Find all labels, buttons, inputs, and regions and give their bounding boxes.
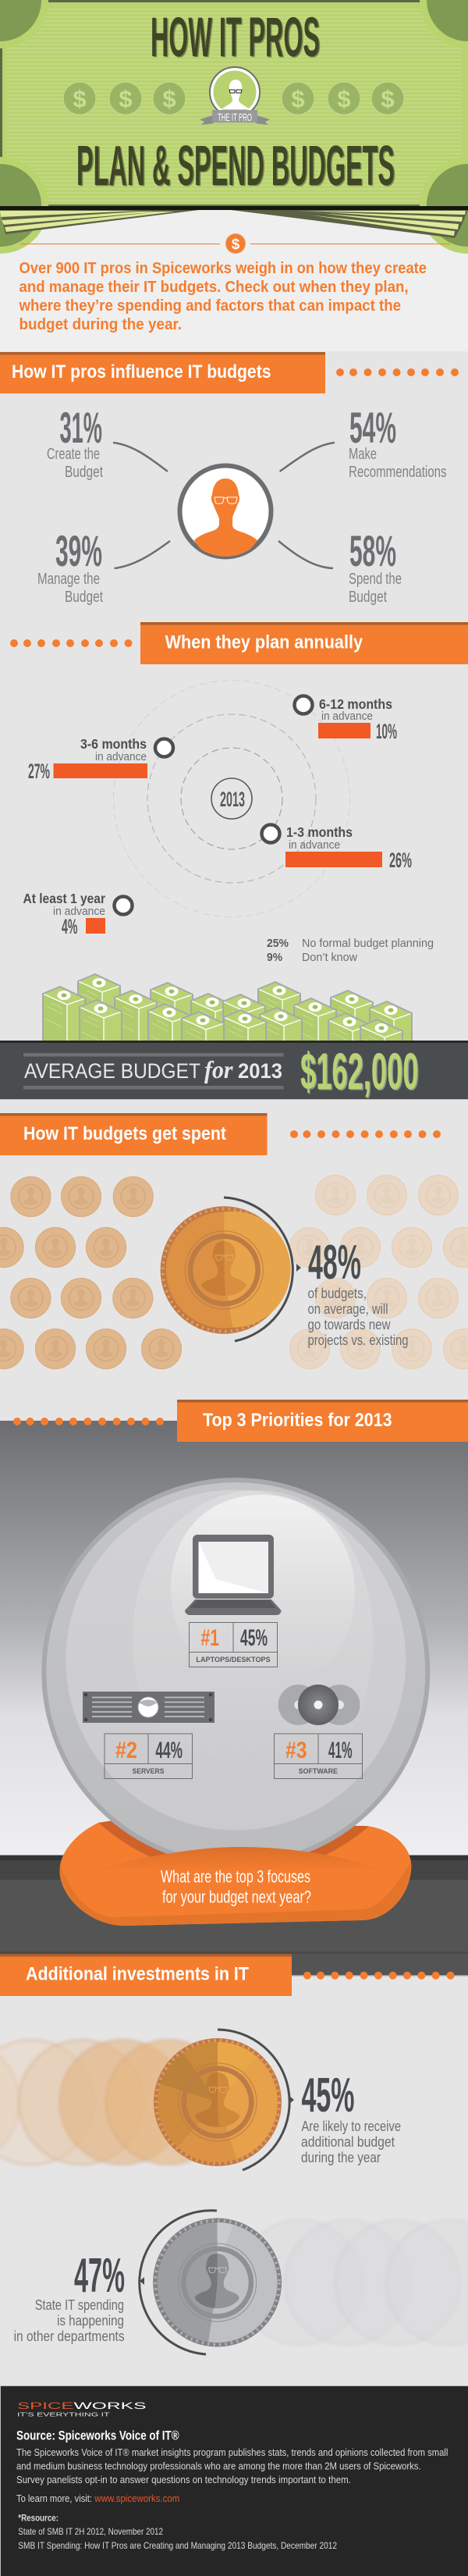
intro text: where they’re spending and factors that can impact the <box>19 297 401 315</box>
stat: 47%: is happening <box>57 2313 124 2329</box>
infographic: 31% <box>59 403 102 452</box>
stat: 47%: State IT spending <box>35 2297 124 2313</box>
section banner: additional investments: Additional investments in IT <box>26 1964 249 1985</box>
section banner: when they plan: When they plan annually <box>165 632 363 653</box>
stat: 48%: of budgets, <box>307 1286 367 1301</box>
logo: Spiceworks: IT’S EVERYTHING IT <box>17 2411 110 2418</box>
pillow back <box>59 1820 412 1926</box>
logo: Spiceworks <box>17 2402 147 2418</box>
data: 1-3 months: 26% <box>389 849 412 872</box>
data: 3-6 months: in advance <box>95 750 147 763</box>
ghost coins orange <box>0 2040 231 2165</box>
section banner: how IT pros influence: How IT pros influence IT budgets <box>12 361 271 382</box>
coins: existing projects <box>0 1177 181 1369</box>
no plan stats <box>267 937 434 964</box>
resources: SMB IT Spending: How IT Pros are Creating and Managing 2013 Budgets, December 2012 <box>18 2540 337 2551</box>
stat: 48%: 48% <box>308 1236 361 1290</box>
stat: 47%: in other departments <box>14 2329 125 2344</box>
coins: new projects <box>290 1176 468 1369</box>
badge: the IT pro: THE IT PRO <box>218 111 252 123</box>
dollar coins: $ <box>119 85 133 112</box>
data: 6-12 months <box>295 696 397 743</box>
learn more link: To learn more, visit: <box>16 2492 92 2504</box>
stat: 31% create: Budget <box>65 464 103 481</box>
average budget band: 2013 <box>238 1059 282 1083</box>
priority box 1: LAPTOPS/DESKTOPS <box>196 1656 271 1664</box>
icon: laptop <box>185 1535 281 1615</box>
infographic: 10% <box>376 720 397 743</box>
section banner: additional investments <box>0 1954 454 1996</box>
stat: 39% manage: Manage the <box>37 571 100 588</box>
dollar coins: $ <box>73 85 87 112</box>
priority box 2: 44% <box>155 1738 183 1763</box>
data: at least 1 year <box>23 891 133 938</box>
icon: server <box>83 1692 214 1723</box>
data: 3-6 months <box>28 736 173 783</box>
priority box 1: #1 <box>201 1625 219 1651</box>
icon: main coin 48% <box>161 1206 291 1334</box>
icon: coin 45% <box>154 2038 282 2166</box>
priority box 3: SOFTWARE <box>299 1767 338 1776</box>
stat: 45%: during the year <box>301 2150 381 2165</box>
header: dollar bill <box>0 0 468 254</box>
section banner: how budgets get spent: How IT budgets get spent <box>23 1123 226 1144</box>
stat: 54% recommend: 54% <box>349 403 396 452</box>
learn more link <box>16 2492 179 2504</box>
data: at least 1 year: in advance <box>53 905 105 918</box>
arc pointer 47% <box>140 2211 217 2354</box>
intro text <box>19 259 427 333</box>
resources: *Resource: <box>18 2512 58 2523</box>
logo: Spiceworks: SPICE <box>17 2402 74 2411</box>
section banner: when they plan <box>10 622 468 664</box>
intro text: and manage their IT budgets. Check out when they plan, <box>19 278 409 296</box>
icon: coin 47% <box>153 2218 282 2347</box>
divider with coin <box>20 234 450 253</box>
stat: 45%: 45% <box>301 2069 354 2122</box>
source description: and medium business technology professionals who are among the more than 2M users of Spiceworks. <box>16 2460 421 2471</box>
stat: 47% <box>14 2249 125 2344</box>
dollar coins <box>63 82 404 115</box>
average budget band: AVERAGE BUDGET <box>24 1059 200 1083</box>
data: at least 1 year: 4% <box>62 915 78 938</box>
data: 6-12 months: 6-12 months <box>319 696 392 712</box>
dollar coins: $ <box>337 85 351 112</box>
data: 6-12 months: in advance <box>321 710 373 723</box>
ghost coins gray <box>238 2220 468 2345</box>
stat: 58% spend <box>349 526 402 606</box>
stat: 31% create: Create the <box>47 446 100 463</box>
data: 1-3 months <box>262 824 412 872</box>
no plan stats: 25% <box>267 937 289 950</box>
chart: concentric timeline: 2013 <box>220 788 245 811</box>
priority box 3: #3 <box>285 1738 307 1763</box>
priority box 3 <box>275 1734 362 1778</box>
stat: 39% manage <box>37 526 103 606</box>
resources <box>18 2512 337 2551</box>
average budget band <box>0 1041 468 1100</box>
stat: 45% <box>301 2069 401 2165</box>
badge: the IT pro <box>200 67 270 125</box>
section banner: top 3 priorities: Top 3 Priorities for 2013 <box>203 1410 392 1431</box>
divider with coin: $ <box>232 237 240 253</box>
money stacks <box>42 973 413 1041</box>
connector curves <box>113 443 335 568</box>
stat: 58% spend: 58% <box>349 526 396 575</box>
priorities backdrop <box>0 1421 468 1976</box>
arc pointer 48% <box>224 1197 301 1341</box>
footer <box>0 2386 468 2576</box>
data: 1-3 months: in advance <box>289 838 340 852</box>
crystal ball <box>44 1480 427 1864</box>
dollar coins: $ <box>381 85 395 112</box>
pillow front with question <box>60 1847 411 1926</box>
stat: 54% recommend: Make <box>349 446 377 463</box>
stat: 48%: projects vs. existing <box>307 1332 409 1348</box>
stat: 45%: additional budget <box>301 2134 395 2150</box>
average budget band: for <box>204 1055 233 1083</box>
icon: software discs <box>278 1685 360 1725</box>
resources: State of SMB IT 2H 2012, November 2012 <box>18 2526 163 2537</box>
stat: 45%: Are likely to receive <box>301 2119 401 2134</box>
arc pointer 45% <box>218 2030 294 2170</box>
dollar coins: $ <box>162 85 176 112</box>
intro text: Over 900 IT pros in Spiceworks weigh in on how they create <box>19 259 427 277</box>
stat: 58% spend: Budget <box>349 589 387 606</box>
logo: Spiceworks: WORKS <box>73 2402 147 2411</box>
priority box 3: 41% <box>328 1738 353 1763</box>
priority box 1: 45% <box>240 1625 268 1651</box>
priority box 2 <box>105 1734 192 1778</box>
priority box 2: SERVERS <box>133 1767 164 1776</box>
source heading: Source: Spiceworks Voice of IT® <box>16 2428 179 2443</box>
chart: concentric timeline <box>114 681 349 916</box>
data: 3-6 months: 3-6 months <box>80 736 147 752</box>
section banner: how IT pros influence <box>0 352 459 393</box>
source description: Survey panelists opt-in to answer questions on technology trends important to them. <box>16 2474 351 2485</box>
no plan stats: No formal budget planning <box>302 937 434 950</box>
data: at least 1 year: At least 1 year <box>23 891 105 906</box>
source description <box>16 2446 448 2485</box>
data: 1-3 months: 1-3 months <box>286 824 353 840</box>
pillow front with question: What are the top 3 focuses <box>161 1867 310 1887</box>
data: 3-6 months: 27% <box>28 760 50 783</box>
icon: IT pro portrait <box>179 465 271 559</box>
stat: 58% spend: Spend the <box>349 571 402 588</box>
dollar coins: $ <box>291 85 305 112</box>
no plan stats: Don’t know <box>302 951 357 964</box>
stat: 39% manage: 39% <box>55 526 102 575</box>
bill stack fan <box>0 206 468 238</box>
stat: 48%: go towards new <box>307 1317 391 1332</box>
section banner: how budgets get spent <box>0 1113 441 1155</box>
intro text: budget during the year. <box>19 315 182 333</box>
no plan stats: 9% <box>267 951 282 964</box>
stat: 54% recommend <box>349 403 446 481</box>
priority box 2: #2 <box>115 1738 137 1763</box>
stat: 48%: on average, will <box>307 1301 388 1317</box>
stat: 47%: 47% <box>74 2249 125 2303</box>
stat: 31% create <box>47 403 103 481</box>
stat: 39% manage: Budget <box>65 589 103 606</box>
pillow front with question: for your budget next year? <box>162 1888 311 1907</box>
priority box 1 <box>189 1622 278 1667</box>
section banner: top 3 priorities <box>13 1400 468 1442</box>
stat: 48% <box>307 1236 409 1348</box>
learn more link: www.spiceworks.com <box>94 2492 179 2504</box>
